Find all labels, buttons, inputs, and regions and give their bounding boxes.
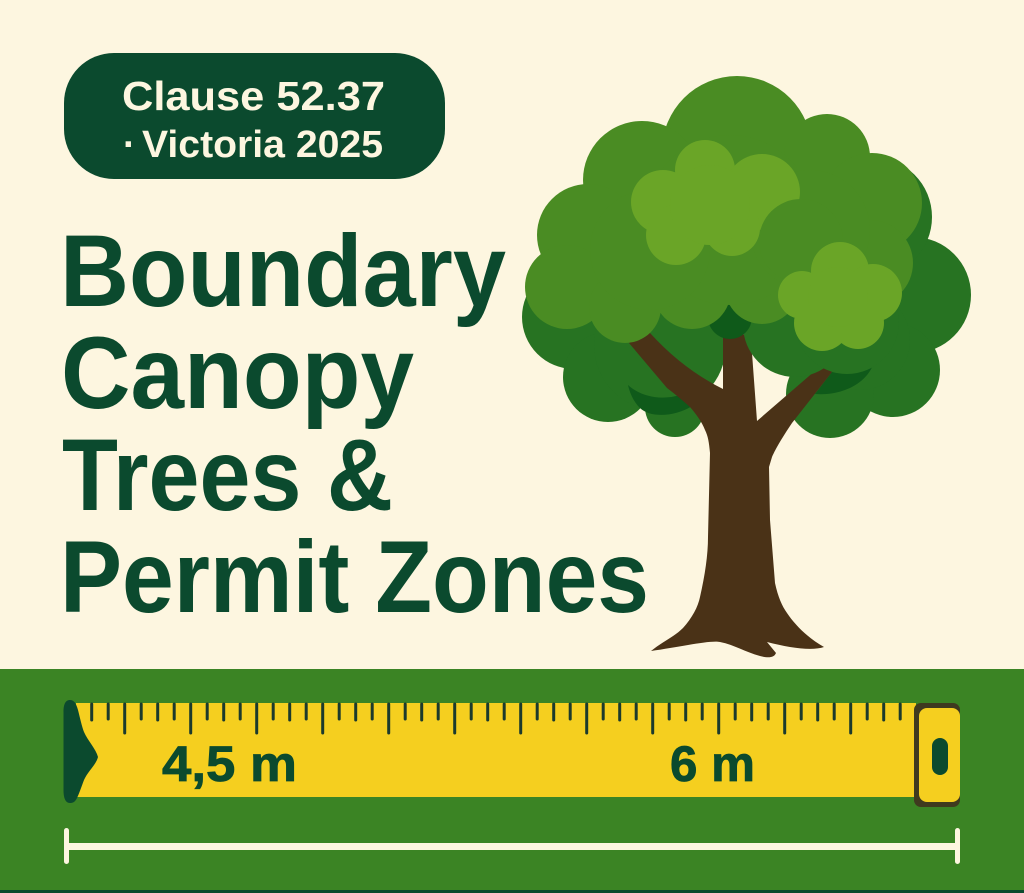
badge: Clause 52.37 Victoria 2025 (64, 53, 445, 179)
title (60, 214, 649, 634)
trunk top shadow (708, 295, 752, 339)
tape ticks (92, 704, 900, 733)
badge: Clause 52.37 Victoria 2025: Clause 52.37 (122, 73, 385, 119)
highlight foliage lower (778, 242, 902, 351)
label: 4,5 m: 4,5 m (162, 736, 297, 792)
back foliage (522, 157, 971, 438)
main foliage (525, 76, 922, 343)
ground bottom band (0, 890, 1024, 893)
tape case (914, 703, 960, 807)
highlight foliage upper (631, 140, 800, 265)
measuring tape (64, 700, 960, 807)
tape hook (64, 700, 98, 803)
title: Boundary (60, 214, 506, 328)
foliage shadow crescents (628, 365, 873, 415)
title: Trees & (62, 418, 393, 532)
ground panel (0, 669, 1024, 893)
dimension line (64, 828, 960, 864)
title: Permit Zones (60, 520, 649, 634)
icon: tree (522, 76, 971, 657)
badge: Clause 52.37 Victoria 2025: Victoria 2025 (142, 124, 383, 166)
highlight cut-out (759, 199, 843, 283)
trunk (629, 333, 832, 657)
badge: Clause 52.37 Victoria 2025: · (123, 124, 136, 166)
front lower foliage (743, 270, 899, 377)
tape body (76, 703, 916, 797)
title: Canopy (61, 316, 414, 430)
label: 6 m: 6 m (670, 736, 755, 792)
